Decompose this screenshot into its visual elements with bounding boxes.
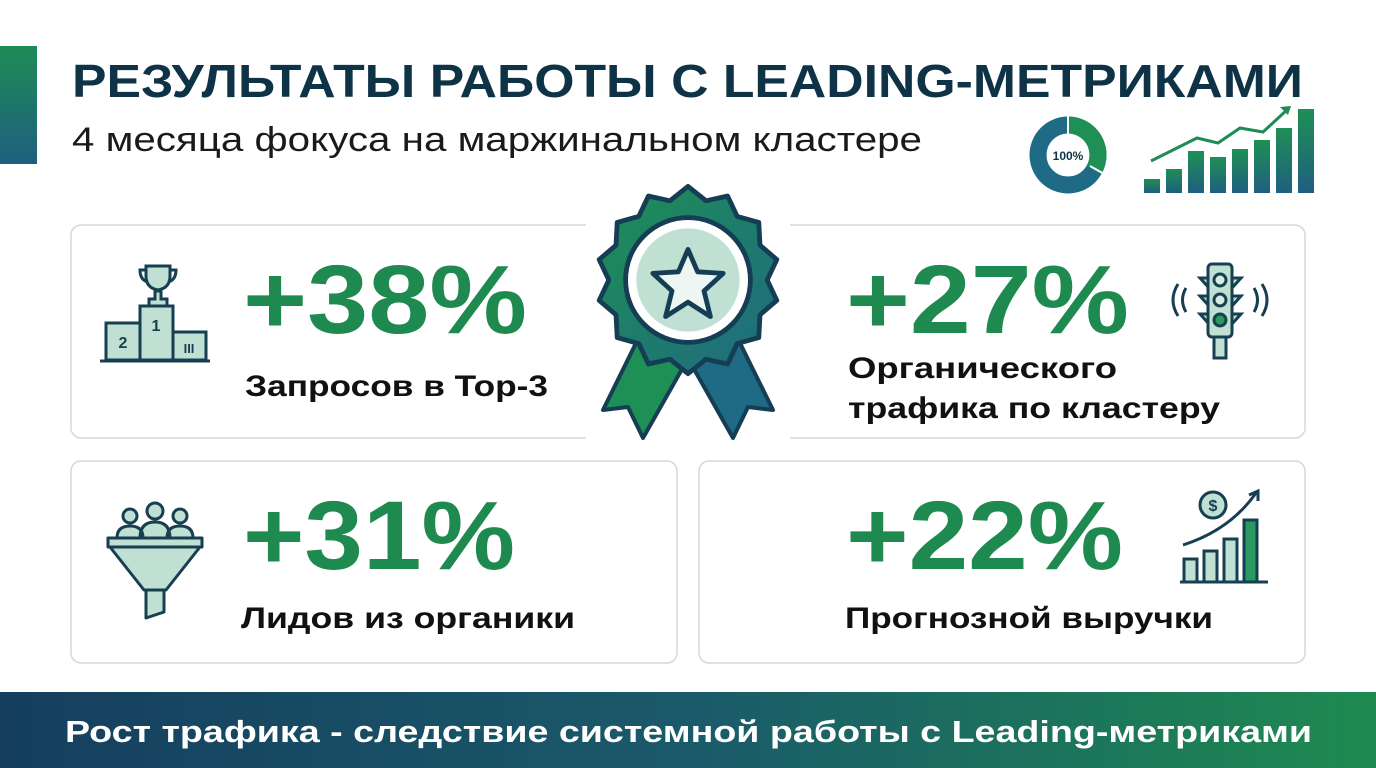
stat: +22%: Прогнозной выручки	[845, 602, 1213, 635]
icon: traffic light	[1173, 264, 1267, 358]
panel: leads	[71, 461, 677, 663]
stat: +31%: +31%	[243, 481, 515, 590]
stat: +22%	[845, 481, 1213, 635]
icon: funnel with people	[108, 503, 202, 618]
accent bar	[0, 46, 37, 164]
stat: +27%: Органического	[848, 352, 1117, 385]
stat: +38%	[243, 245, 548, 403]
stat: +38%: +38%	[243, 245, 527, 354]
icon: podium with trophy	[100, 266, 210, 361]
panel: revenue	[699, 461, 1305, 663]
icon: podium with trophy: 1	[152, 318, 161, 335]
footer banner	[0, 692, 1376, 768]
subtitle: 4 месяца фокуса на маржинальном кластере	[72, 121, 922, 159]
stat: +22%: +22%	[846, 481, 1123, 590]
stat: +27%: +27%	[846, 245, 1129, 354]
panel: top stats box	[71, 210, 1305, 450]
icon: podium with trophy: III	[184, 341, 194, 356]
icon: podium with trophy: 2	[119, 335, 128, 352]
footer banner: Рост трафика - следствие системной работы с Leading-метриками	[65, 714, 1312, 749]
icon: award medal	[599, 186, 777, 438]
stat: +27%	[846, 245, 1220, 425]
stat: +38%: Запросов в Top-3	[245, 370, 548, 403]
stat: +27%: трафика по кластеру	[848, 392, 1220, 425]
icon: revenue growth	[1180, 491, 1268, 582]
title: РЕЗУЛЬТАТЫ РАБОТЫ С LEADING-МЕТРИКАМИ	[72, 55, 1303, 107]
icon: donut chart	[1038, 116, 1106, 185]
icon: growth bar chart	[1144, 106, 1314, 193]
stat: +31%	[241, 481, 575, 635]
stat: +31%: Лидов из органики	[241, 602, 575, 635]
icon: donut chart: 100%	[1053, 149, 1084, 163]
icon: revenue growth: $	[1209, 498, 1218, 515]
